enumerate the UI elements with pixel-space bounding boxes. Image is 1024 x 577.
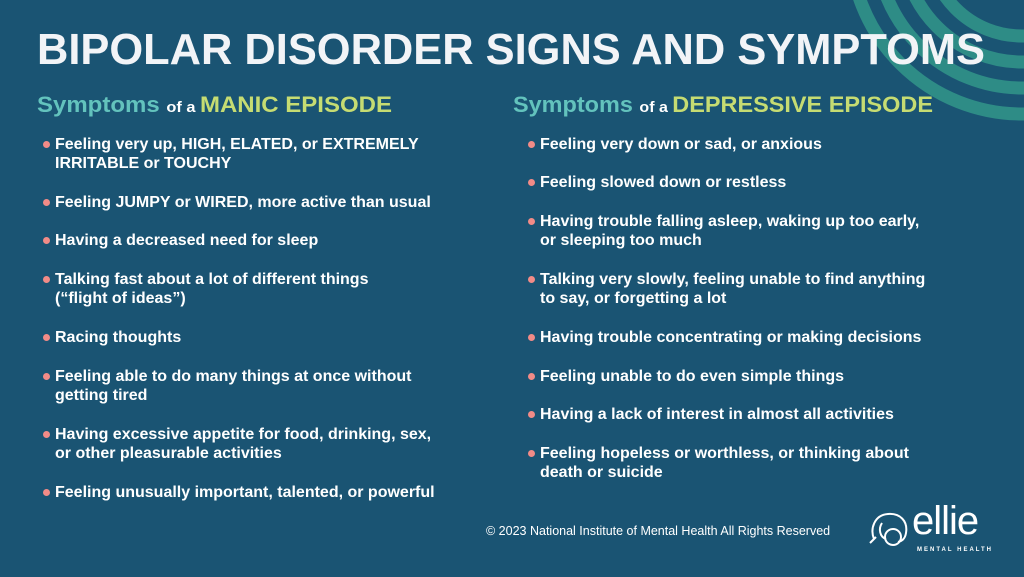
list: depressive symptoms: death or suicide [540,464,663,481]
list: depressive symptoms: Feeling unable to do even simple things [540,368,844,385]
list: manic symptoms: Talking fast about a lot of different things [55,271,368,288]
list: manic symptoms: getting tired [55,387,147,404]
list: depressive symptoms: Having trouble concentrating or making decisions [540,329,921,346]
list: manic symptoms: Feeling unusually important, talented, or powerful [55,484,435,501]
list: manic symptoms: Feeling very up, HIGH, ELATED, or EXTREMELY [55,136,419,153]
list: depressive symptoms [528,136,925,481]
logo: ellie mental health: MENTAL HEALTH [917,547,993,553]
list: depressive symptoms: Having trouble falling asleep, waking up too early, [540,213,919,230]
list: manic symptoms: Racing thoughts [55,329,181,346]
heading: manic: Symptoms of a MANIC EPISODE [37,92,392,117]
list: manic symptoms: IRRITABLE or TOUCHY [55,155,231,172]
list: manic symptoms: Having a decreased need for sleep [55,232,318,249]
footer copyright: © 2023 National Institute of Mental Health All Rights Reserved [486,524,830,538]
logo: ellie mental health [869,499,993,553]
list: depressive symptoms: or sleeping too much [540,232,702,249]
icon: elephant [869,512,908,546]
list: depressive symptoms: Feeling hopeless or worthless, or thinking about [540,445,909,462]
list: manic symptoms: (“flight of ideas”) [55,290,186,307]
list: manic symptoms: Feeling able to do many things at once without [55,368,411,385]
wordmark: ellie [912,499,978,543]
list: depressive symptoms: to say, or forgetting a lot [540,290,726,307]
list: depressive symptoms: Feeling very down or sad, or anxious [540,136,822,153]
title: BIPOLAR DISORDER SIGNS AND SYMPTOMS [37,25,985,74]
list: depressive symptoms: Talking very slowly, feeling unable to find anything [540,271,925,288]
list: depressive symptoms: Feeling slowed down or restless [540,174,786,191]
list: manic symptoms: Feeling JUMPY or WIRED, more active than usual [55,194,431,211]
list: manic symptoms [43,136,435,501]
list: manic symptoms: or other pleasurable activities [55,445,282,462]
heading: depressive: Symptoms of a DEPRESSIVE EPISODE [513,92,933,117]
list: depressive symptoms: Having a lack of interest in almost all activities [540,406,894,423]
list: manic symptoms: Having excessive appetite for food, drinking, sex, [55,426,431,443]
